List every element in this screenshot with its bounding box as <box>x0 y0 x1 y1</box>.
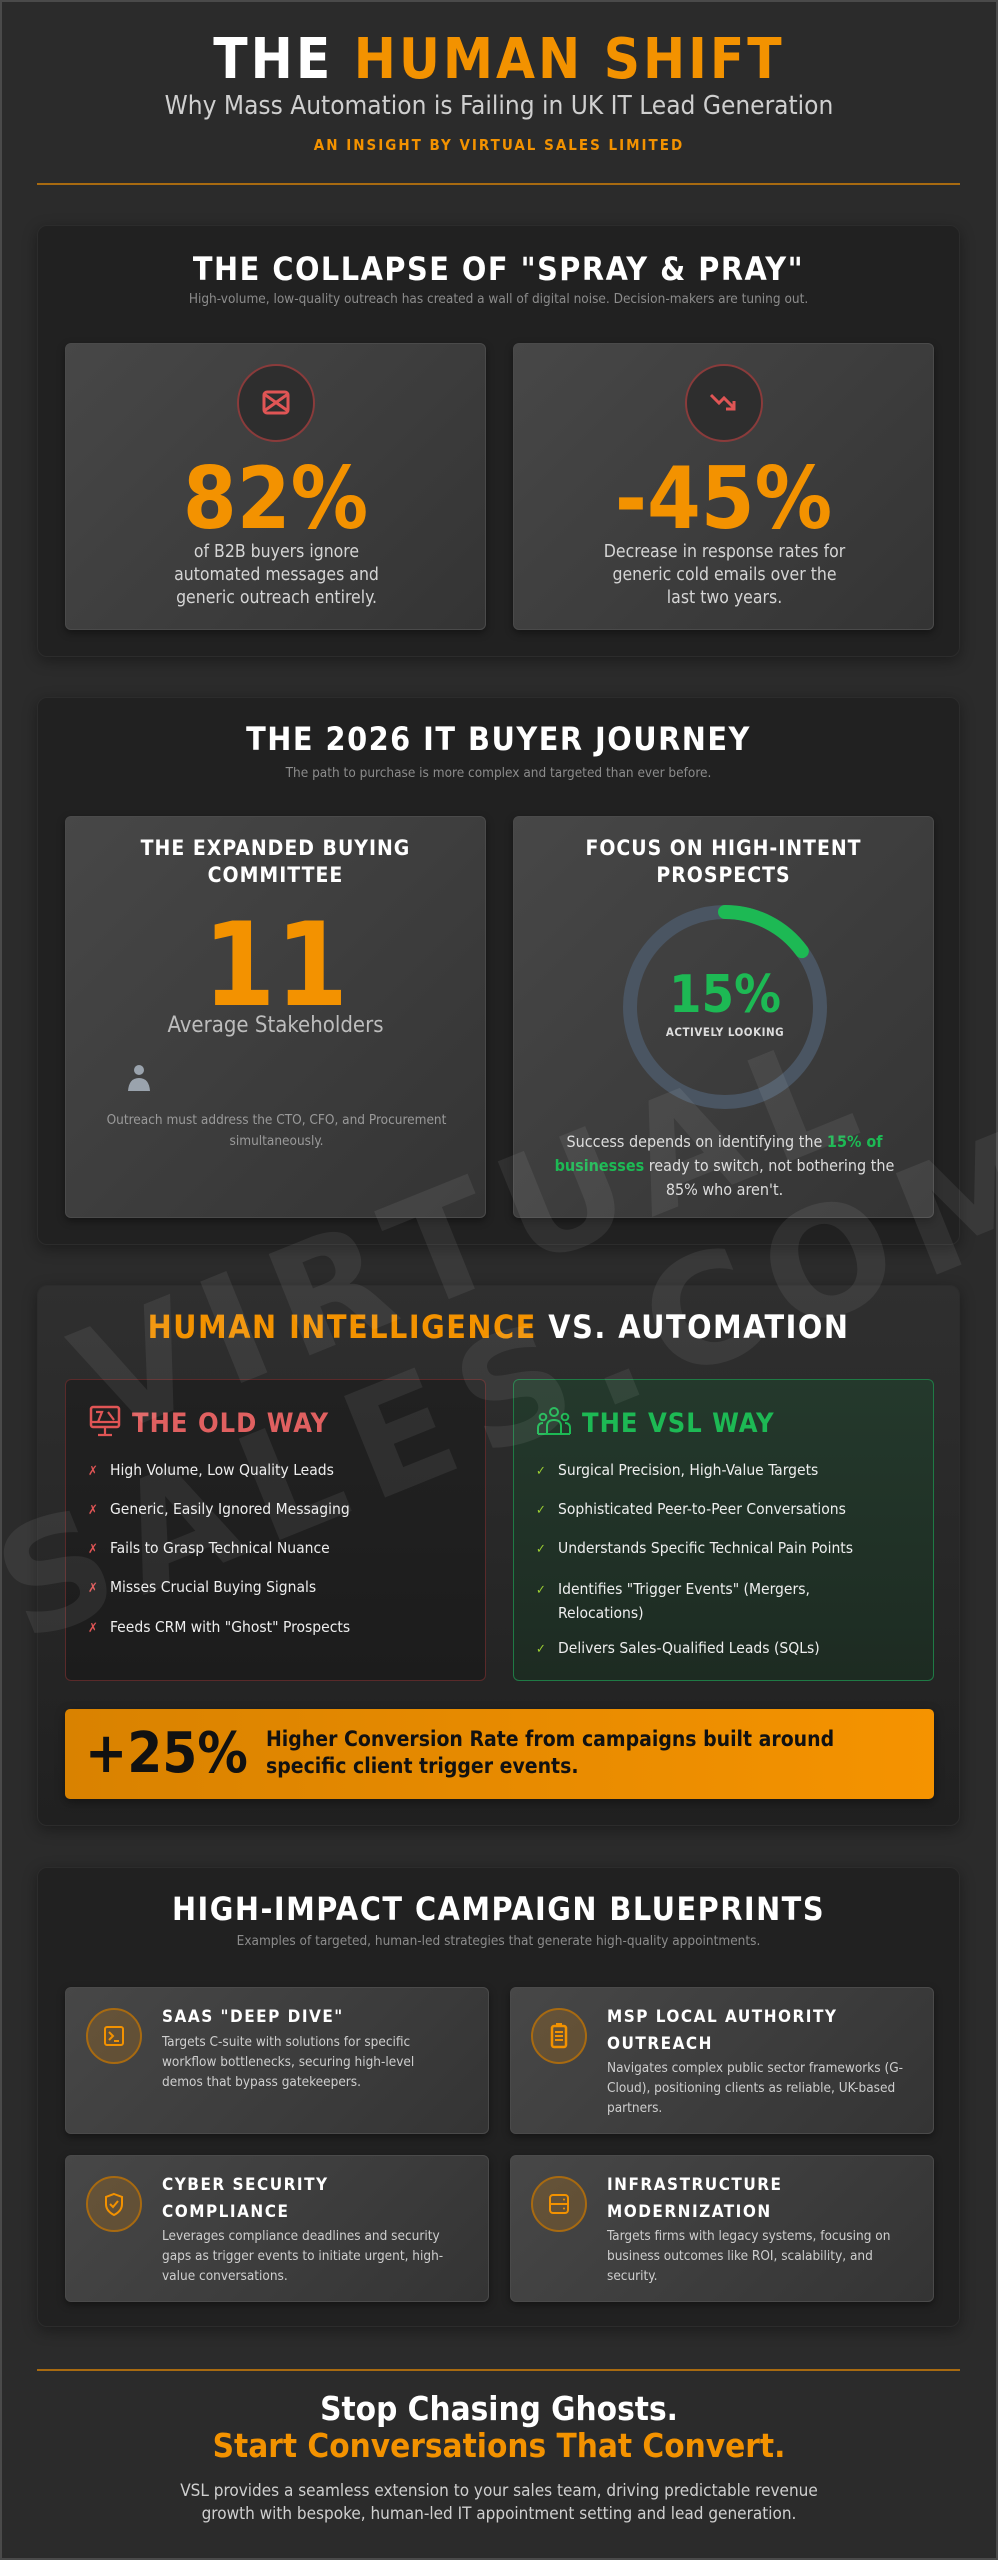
intro text: High-volume, low-quality outreach has created a wall of digital noise. Decision-makers are tuning out. <box>189 291 808 307</box>
big number: -45% <box>615 449 832 549</box>
heading: HIGH-IMPACT CAMPAIGN BLUEPRINTS <box>172 1890 825 1928</box>
vsl way box: ✓ <box>536 1583 546 1598</box>
card heading: FOCUS ON HIGH-INTENT <box>585 836 862 860</box>
subtitle: Why Mass Automation is Failing in UK IT Lead Generation <box>165 91 833 121</box>
card heading <box>585 836 862 887</box>
panel: campaign blueprints <box>37 1867 960 2327</box>
note: Outreach must address the CTO, CFO, and Procurement simultaneously. <box>107 1112 446 1149</box>
old way list: Feeds CRM with "Ghost" Prospects <box>110 1618 350 1636</box>
vsl way header: THE VSL WAY <box>582 1408 775 1439</box>
icon: blocked mail <box>237 364 315 442</box>
note: Success depends on identifying the 15% of businesses ready to switch, not bothering the 85% who aren't. <box>555 1132 894 1199</box>
title: MSP LOCAL AUTHORITY OUTREACH <box>607 2007 837 2054</box>
vsl way list: Understands Specific Technical Pain Points <box>558 1539 853 1557</box>
donut chart <box>623 905 827 1109</box>
title: SAAS "DEEP DIVE" <box>162 2007 344 2027</box>
vsl way list: Delivers Sales-Qualified Leads (SQLs) <box>558 1639 820 1657</box>
heading: THE COLLAPSE OF "SPRAY & PRAY" <box>193 250 804 288</box>
stat card: -45% <box>513 343 934 630</box>
description: Navigates complex public sector frameworks (G-Cloud), positioning clients as reliable, UK-based partners. <box>607 2060 903 2116</box>
icon: clipboard <box>531 2008 587 2064</box>
panel: human intelligence vs automation <box>37 1285 960 1826</box>
old way list: Generic, Easily Ignored Messaging <box>110 1500 350 1518</box>
icon: terminal <box>86 2008 142 2064</box>
description: of B2B buyers ignore automated messages and generic outreach entirely. <box>174 542 379 608</box>
old way list: Fails to Grasp Technical Nuance <box>110 1539 330 1557</box>
vsl way list: Sophisticated Peer-to-Peer Conversations <box>558 1500 846 1518</box>
old way box: ✗ <box>88 1464 98 1479</box>
old way list: High Volume, Low Quality Leads <box>110 1461 334 1479</box>
icon: shield <box>86 2176 142 2232</box>
byline: AN INSIGHT BY VIRTUAL SALES LIMITED <box>314 136 684 154</box>
banner number: +25% <box>85 1721 248 1786</box>
old way box: ✗ <box>88 1542 98 1557</box>
card heading <box>140 836 410 887</box>
label: Average Stakeholders <box>167 1013 384 1038</box>
cta heading <box>213 2389 785 2465</box>
vsl way box: ✓ <box>536 1464 546 1479</box>
vsl way list: Identifies "Trigger Events" (Mergers, Relocations) <box>558 1580 810 1622</box>
donut value: 15% <box>669 965 781 1025</box>
donut label: ACTIVELY LOOKING <box>666 1025 784 1039</box>
old way box: ✗ <box>88 1621 98 1636</box>
cta text: VSL provides a seamless extension to your sales team, driving predictable revenue growth with bespoke, human-led IT appointment setting and lead generation. <box>180 2481 818 2524</box>
intro text: Examples of targeted, human-led strategies that generate high-quality appointments. <box>237 1933 760 1949</box>
banner text: Higher Conversion Rate from campaigns built around specific client trigger events. <box>266 1727 834 1778</box>
card: cyber security compliance <box>65 2155 489 2302</box>
title: THE HUMAN SHIFT <box>213 27 785 92</box>
vsl way list <box>536 1461 853 1657</box>
vsl way box: ✓ <box>536 1642 546 1657</box>
vsl way box <box>513 1379 934 1681</box>
stat card: 82% <box>65 343 486 630</box>
old way list: Misses Crucial Buying Signals <box>110 1578 316 1596</box>
vsl way box: ✓ <box>536 1542 546 1557</box>
panel: collapse of spray & pray <box>37 225 960 657</box>
cta heading: Start Conversations That Convert. <box>213 2426 785 2465</box>
watermark: VIRTUAL <box>52 997 894 1472</box>
intro text: The path to purchase is more complex and targeted than ever before. <box>286 765 711 781</box>
heading: HUMAN INTELLIGENCE VS. AUTOMATION <box>148 1308 849 1346</box>
card heading: COMMITTEE <box>208 863 343 887</box>
big number 11: 11 <box>203 898 348 1033</box>
card: high-intent prospects <box>513 816 934 1218</box>
title: CYBER SECURITY COMPLIANCE <box>162 2175 329 2222</box>
card: buying committee <box>65 816 486 1218</box>
cta heading: Stop Chasing Ghosts. <box>320 2389 678 2428</box>
old way box: ✗ <box>88 1581 98 1596</box>
card heading: THE EXPANDED BUYING <box>141 836 410 860</box>
description: Leverages compliance deadlines and security gaps as trigger events to initiate urgent, high-value conversations. <box>162 2228 443 2284</box>
icon: person <box>128 1065 150 1091</box>
heading: THE 2026 IT BUYER JOURNEY <box>246 720 751 758</box>
description: Targets firms with legacy systems, focusing on business outcomes like ROI, scalability, and security. <box>607 2228 890 2284</box>
description: Targets C-suite with solutions for specific workflow bottlenecks, securing high-level demos that bypass gatekeepers. <box>162 2034 414 2090</box>
old way box: ✗ <box>88 1503 98 1518</box>
old way box <box>65 1379 486 1681</box>
card heading: PROSPECTS <box>656 863 791 887</box>
big number: 82% <box>183 449 368 549</box>
card: msp local authority <box>510 1987 934 2134</box>
icon: server <box>531 2176 587 2232</box>
vsl way list: Surgical Precision, High-Value Targets <box>558 1461 818 1479</box>
old way list <box>88 1461 350 1636</box>
card: saas deep dive <box>65 1987 489 2134</box>
title: INFRASTRUCTURE MODERNIZATION <box>607 2175 783 2222</box>
old way header: THE OLD WAY <box>132 1408 329 1439</box>
panel: 2026 IT buyer journey <box>37 697 960 1245</box>
description: Decrease in response rates for generic cold emails over the last two years. <box>604 542 845 608</box>
icon: trend down <box>685 364 763 442</box>
callout banner: +25% <box>65 1709 934 1799</box>
footer call to action <box>180 2389 818 2524</box>
vsl way box: ✓ <box>536 1503 546 1518</box>
card: infrastructure modernization <box>510 2155 934 2302</box>
